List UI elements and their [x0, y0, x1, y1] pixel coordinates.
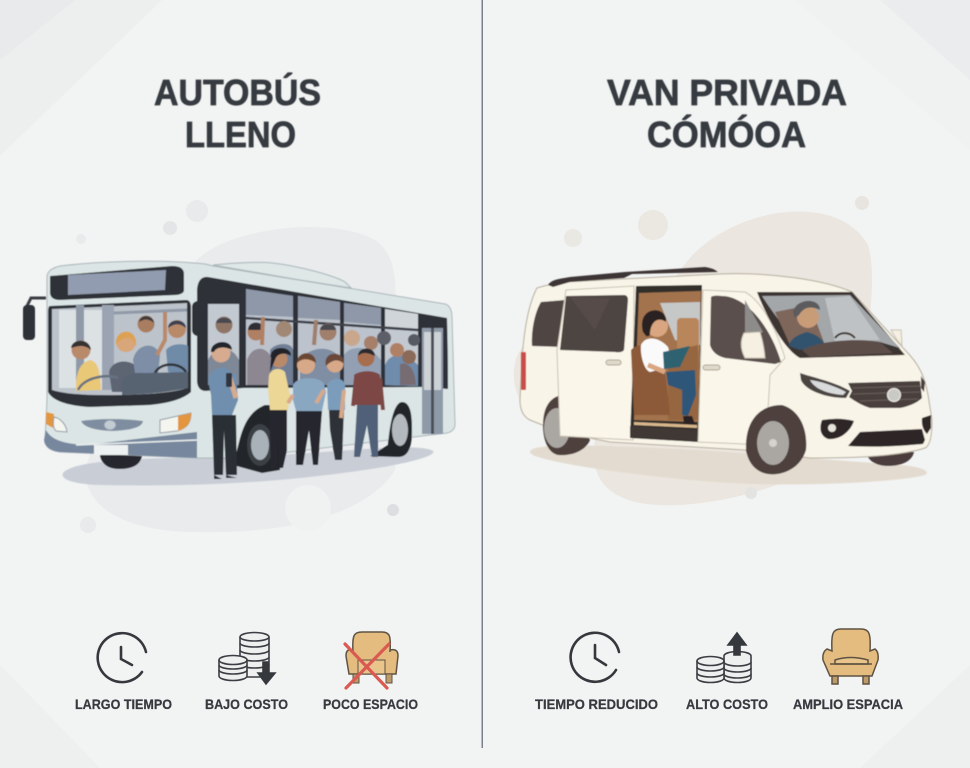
van backdrop blob and dots — [514, 196, 872, 505]
bystander: woman in blue — [326, 354, 345, 460]
destination sign — [50, 266, 184, 300]
side mirror — [23, 298, 46, 340]
passenger right with arm — [166, 344, 188, 375]
dashboard — [122, 372, 188, 395]
icon: armchair — [823, 629, 878, 684]
ground shadow under bus — [63, 447, 433, 485]
exterior mirror — [741, 332, 765, 358]
left title: AUTOBÚS LLENO — [154, 71, 321, 155]
bystander: man with phone — [208, 342, 238, 479]
bus door — [422, 328, 443, 434]
icon: armchair crossed out — [345, 632, 398, 688]
benefit: LARGO TIEMPO — [75, 633, 172, 712]
front wheel — [746, 405, 806, 474]
far mirror — [891, 330, 902, 346]
steering wheels — [155, 365, 186, 373]
bystander: man in blue — [288, 353, 326, 465]
headlights — [46, 412, 54, 428]
benefit: AMPLIO ESPACIA: AMPLIO ESPACIA — [793, 696, 903, 712]
icon: coins with down arrow — [219, 632, 275, 684]
bystander: man in maroon — [353, 348, 383, 457]
headlight — [800, 373, 850, 398]
benefit: AMPLIO ESPACIA — [793, 629, 903, 712]
front bumper — [44, 430, 197, 458]
driver — [775, 305, 825, 345]
passenger blond — [109, 362, 141, 392]
far front wheel — [866, 452, 914, 466]
door handle — [703, 365, 720, 370]
front grille — [81, 419, 143, 431]
side window band — [197, 277, 448, 391]
front door — [698, 290, 785, 445]
bus body — [45, 261, 455, 458]
icon: coins with up arrow — [697, 633, 751, 682]
divider line — [482, 0, 483, 748]
van body — [520, 274, 932, 458]
windshield glass — [52, 303, 187, 395]
rear quarter window — [532, 300, 565, 347]
right title: VAN PRIVADA CÓMÓOA: VAN PRIVADA — [607, 72, 847, 113]
benefit: LARGO TIEMPO: LARGO TIEMPO — [75, 696, 172, 712]
mirror inner — [192, 301, 208, 336]
windshield frame — [48, 300, 191, 407]
benefit: TIEMPO REDUCIDO: TIEMPO REDUCIDO — [535, 696, 658, 712]
roof hatch — [213, 262, 351, 288]
left title: AUTOBÚS LLENO: LLENO — [185, 114, 296, 155]
right title: VAN PRIVADA CÓMÓOA: CÓMÓOA — [647, 113, 806, 155]
benefit: BAJO COSTO — [205, 632, 288, 712]
benefit: TIEMPO REDUCIDO — [535, 633, 658, 712]
front under-wheel — [100, 455, 142, 469]
front grille — [848, 376, 925, 408]
front door window — [710, 296, 781, 364]
roof rails — [548, 267, 718, 287]
benefit: POCO ESPACIO — [323, 632, 418, 712]
right title: VAN PRIVADA CÓMÓOA — [607, 72, 847, 155]
bystander: woman in yellow — [268, 348, 291, 468]
left title: AUTOBÚS LLENO: AUTOBÚS — [154, 71, 321, 113]
illustration: crowded bus — [23, 261, 455, 485]
passenger standing — [133, 346, 160, 375]
door opening and interior — [630, 285, 702, 442]
driver — [76, 360, 101, 391]
icon: clock — [98, 633, 146, 682]
fog lamps and lower intake — [820, 415, 931, 447]
icon: clock — [571, 633, 619, 682]
passengers in side windows — [208, 316, 420, 386]
illustration: comfortable van — [520, 267, 932, 484]
passengers behind windshield — [71, 312, 188, 395]
sliding door handle — [606, 360, 621, 365]
bus backdrop blob and dots — [76, 200, 399, 533]
rear wheel — [543, 395, 590, 455]
benefit: POCO ESPACIO: POCO ESPACIO — [323, 696, 418, 712]
benefit: ALTO COSTO: ALTO COSTO — [686, 696, 768, 712]
benefit: ALTO COSTO — [686, 633, 768, 712]
sliding door — [557, 286, 634, 440]
rear wheel — [370, 402, 412, 457]
side windows — [208, 289, 418, 386]
reading passenger — [641, 310, 696, 424]
license plate — [94, 445, 128, 455]
benefit: BAJO COSTO: BAJO COSTO — [205, 696, 288, 712]
ground shadow under van — [530, 445, 927, 484]
sliding door window — [560, 295, 628, 352]
tail light — [521, 352, 526, 390]
middle wheel — [233, 405, 280, 473]
windshield — [757, 292, 905, 358]
